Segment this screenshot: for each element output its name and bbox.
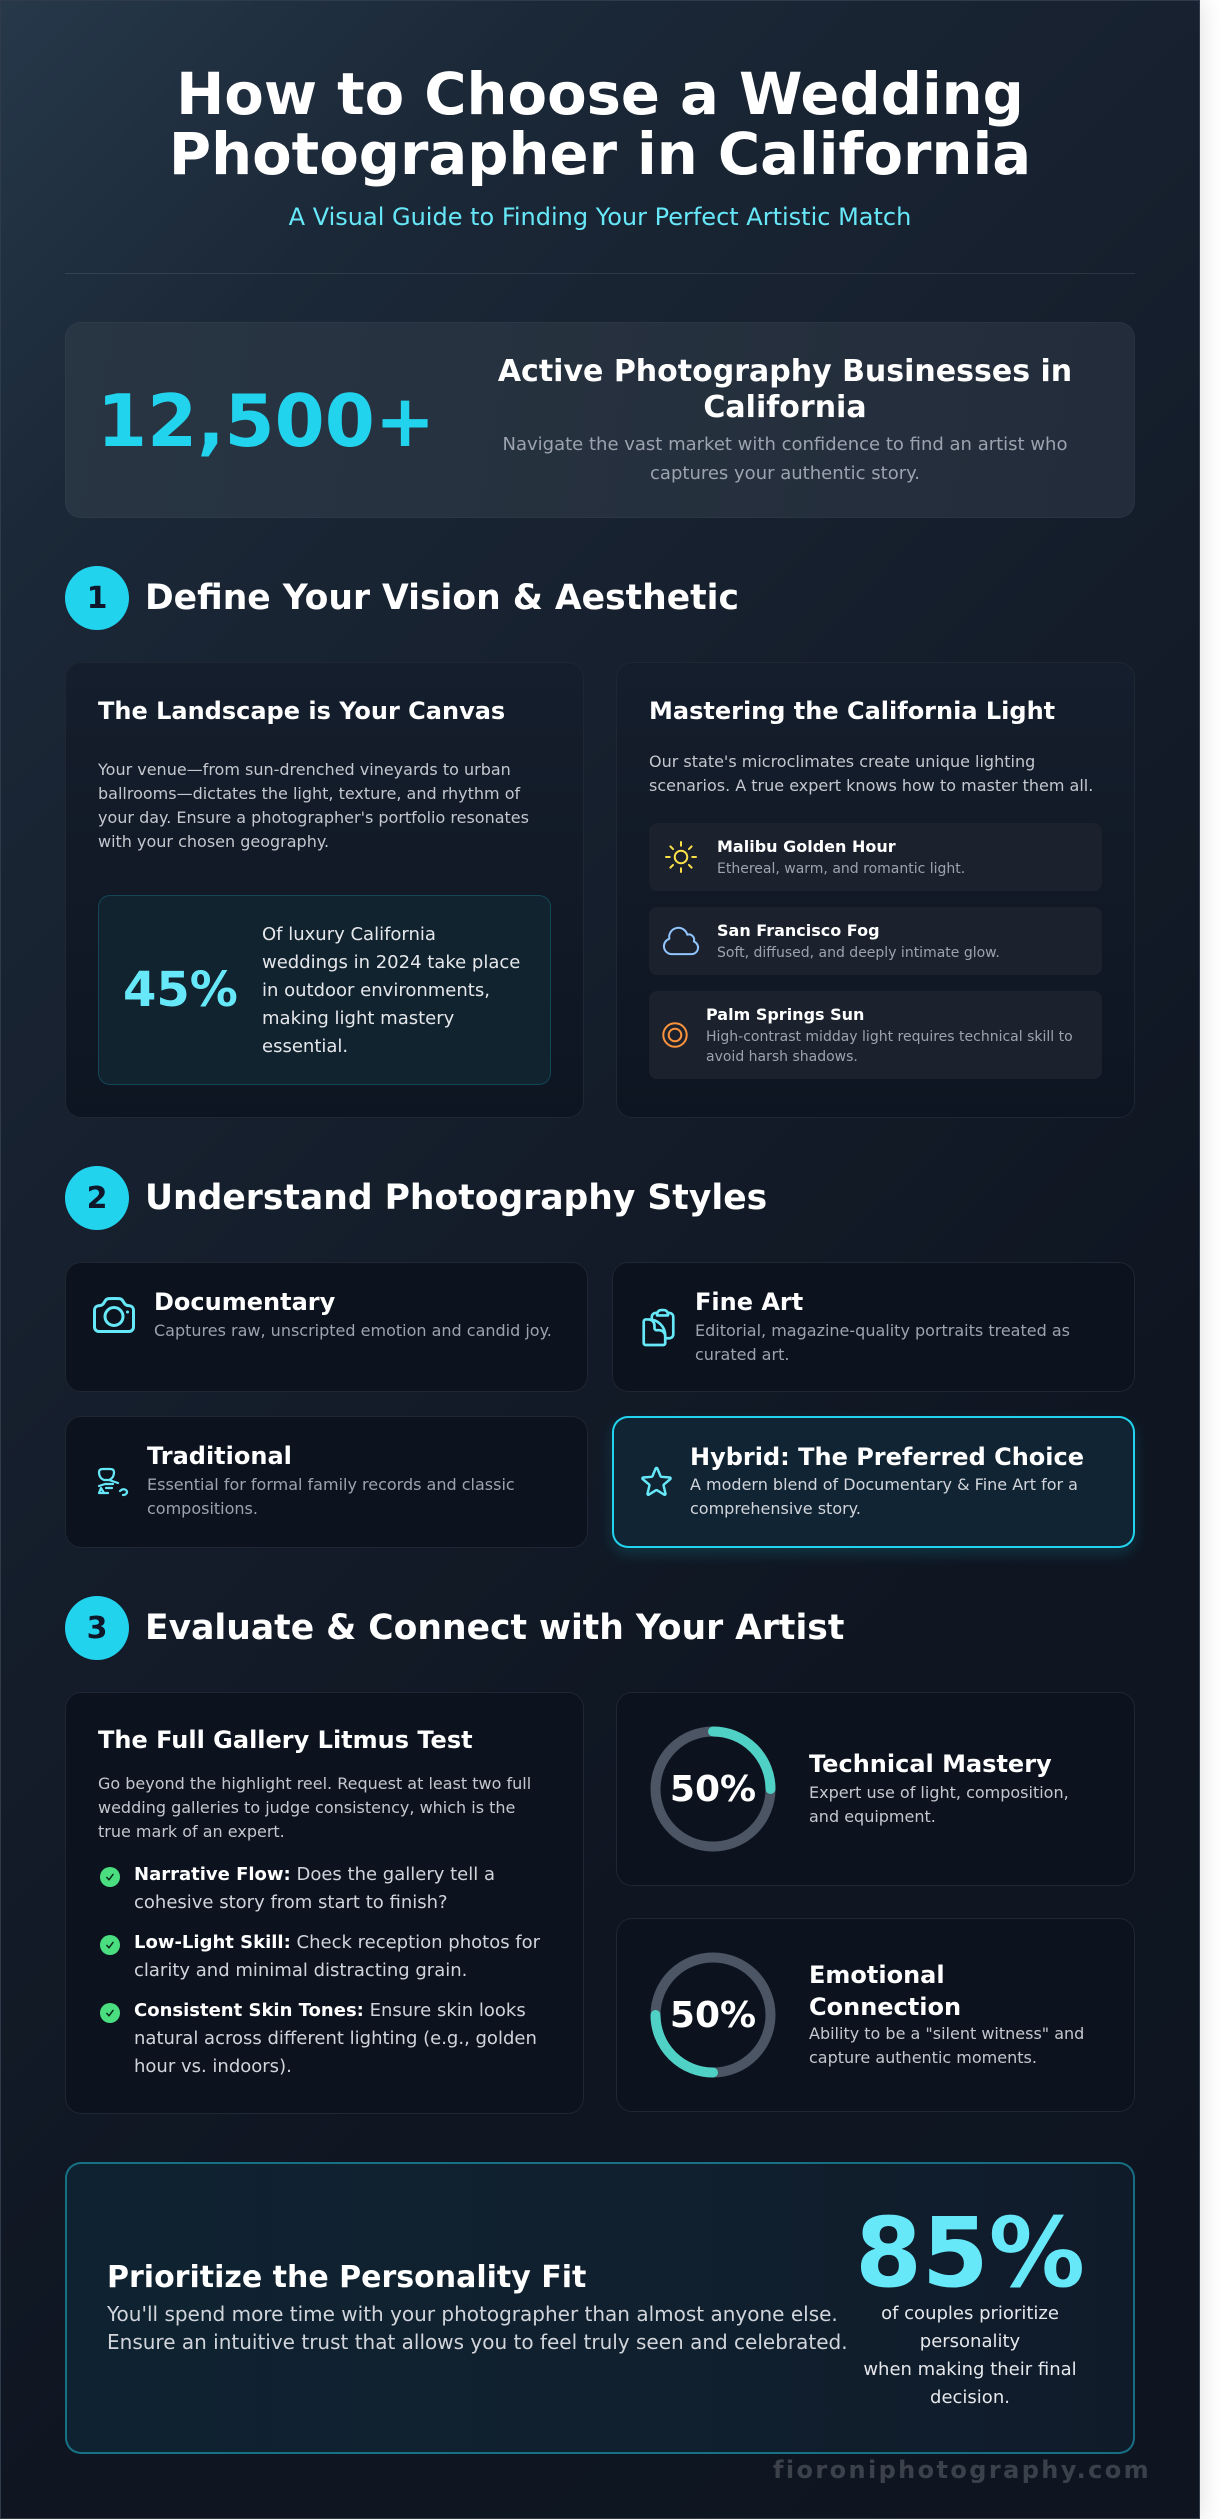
stat heading: California	[703, 390, 867, 425]
stat description: Navigate the vast market with confidence to find an artist who	[503, 434, 1067, 455]
stat heading: Active Photography Businesses in	[498, 354, 1072, 389]
ring chart: 50 percent	[650, 1726, 776, 1852]
step number 1	[65, 566, 129, 630]
style text: compositions.	[147, 1499, 258, 1518]
item text: Soft, diffused, and deeply intimate glow.	[717, 945, 1000, 961]
style card: Traditional	[65, 1416, 588, 1548]
title: Photographer in California	[169, 121, 1031, 188]
panel: california light	[616, 662, 1135, 1118]
list item 2	[134, 1932, 540, 1981]
metric title: Connection	[809, 1993, 961, 2021]
callout heading: Prioritize the Personality Fit	[107, 2260, 586, 2295]
metric title	[809, 1961, 961, 2021]
heading text: Evaluate & Connect with Your Artist	[145, 1608, 844, 1648]
section heading 2	[65, 1166, 767, 1230]
callout text: Ensure an intuitive trust that allows you to feel truly seen and celebrated.	[107, 2330, 848, 2354]
item title: Malibu Golden Hour	[717, 837, 896, 856]
metric text: Expert use of light, composition,	[809, 1783, 1069, 1802]
ring chart: 50 percent: 50%	[670, 1995, 756, 2036]
list item 3: Consistent Skin Tones: Ensure skin looks	[134, 2000, 526, 2021]
big stat: 85%	[855, 2197, 1085, 2309]
icon: clipboard	[642, 1308, 675, 1346]
title: How to Choose a Wedding	[176, 61, 1024, 128]
heading text: Understand Photography Styles	[145, 1178, 767, 1218]
metric title: Emotional	[809, 1961, 945, 1989]
icon: check 2	[100, 1935, 120, 1955]
metric text: and equipment.	[809, 1807, 936, 1826]
subtitle: A Visual Guide to Finding Your Perfect Artistic Match	[289, 203, 911, 231]
icon: cloud	[662, 926, 700, 956]
card heading: The Landscape is Your Canvas	[98, 697, 505, 725]
style name: Documentary	[154, 1288, 335, 1316]
list item 1	[134, 1864, 495, 1913]
ring chart: 50 percent: 50%	[670, 1769, 756, 1810]
stat value: 45%	[123, 962, 238, 1018]
style text	[695, 1321, 1070, 1364]
card text: scenarios. A true expert knows how to master them all.	[649, 776, 1093, 795]
style text: Editorial, magazine-quality portraits treated as	[695, 1321, 1070, 1340]
icon: camera	[93, 1297, 135, 1333]
card text	[98, 760, 529, 851]
metric text: Ability to be a "silent witness" and	[809, 2024, 1084, 2043]
style text: A modern blend of Documentary & Fine Art for a	[690, 1475, 1078, 1494]
list item 3: hour vs. indoors).	[134, 2056, 292, 2077]
big stat caption	[863, 2303, 1077, 2408]
header	[65, 65, 1135, 274]
stat number: 12,500+	[97, 379, 435, 463]
list item 3: natural across different lighting (e.g., golden	[134, 2028, 537, 2049]
list item 2: clarity and minimal distracting grain.	[134, 1960, 467, 1981]
light item: Malibu	[649, 823, 1102, 891]
style text: Captures raw, unscripted emotion and candid joy.	[154, 1321, 552, 1340]
stat heading	[498, 354, 1072, 425]
item text: avoid harsh shadows.	[706, 1049, 858, 1065]
stat text: in outdoor environments,	[262, 980, 490, 1001]
metric text	[809, 2024, 1084, 2067]
card text: Our state's microclimates create unique lighting	[649, 752, 1035, 771]
icon: check 1	[100, 1867, 120, 1887]
list item 3	[134, 2000, 537, 2077]
stat text	[262, 924, 520, 1057]
light item: San Francisco	[649, 907, 1102, 975]
callout: 45 percent	[98, 895, 551, 1085]
card text: Your venue—from sun-drenched vineyards to urban	[98, 760, 511, 779]
card text: Go beyond the highlight reel. Request at least two full	[98, 1774, 531, 1793]
style text: curated art.	[695, 1345, 789, 1364]
style text	[690, 1475, 1078, 1518]
card heading: Mastering the California Light	[649, 697, 1055, 725]
big stat caption: when making their final	[863, 2359, 1077, 2380]
style text	[147, 1475, 515, 1518]
card text	[98, 1774, 531, 1841]
stat description	[503, 434, 1067, 484]
card heading: The Full Gallery Litmus Test	[98, 1726, 473, 1754]
style card: Hybrid highlighted	[612, 1416, 1135, 1548]
step number 1: 1	[87, 581, 107, 616]
section heading 1	[65, 566, 739, 630]
watermark: fioroniphotography.com	[773, 2456, 1151, 2484]
panel: technical mastery	[616, 1692, 1135, 1886]
icon: figures	[98, 1468, 128, 1496]
item title: Palm Springs Sun	[706, 1005, 864, 1024]
item text	[706, 1029, 1073, 1065]
title	[169, 61, 1031, 188]
item text: Ethereal, warm, and romantic light.	[717, 861, 965, 877]
panel: key stat	[65, 322, 1135, 518]
section heading 3	[65, 1596, 844, 1660]
panel: emotional connection	[616, 1918, 1135, 2112]
callout: personality fit	[65, 2162, 1135, 2454]
step number 3	[65, 1596, 129, 1660]
ring chart: 50 percent	[650, 1952, 776, 2078]
style name: Traditional	[147, 1442, 292, 1470]
card text: ballrooms—dictates the light, texture, and rhythm of	[98, 784, 520, 803]
callout text: You'll spend more time with your photographer than almost anyone else.	[107, 2302, 838, 2326]
icon: star	[641, 1466, 672, 1496]
icon: target sun	[662, 1022, 688, 1048]
callout text	[107, 2302, 848, 2354]
metric title: Technical Mastery	[809, 1750, 1052, 1778]
heading text: Define Your Vision & Aesthetic	[145, 578, 739, 618]
stat text: weddings in 2024 take place	[262, 952, 520, 973]
panel: landscape	[65, 662, 584, 1118]
card text	[649, 752, 1093, 795]
stat text: essential.	[262, 1036, 348, 1057]
light item: Palm Springs	[649, 991, 1102, 1079]
card text: with your chosen geography.	[98, 832, 329, 851]
stat text: making light mastery	[262, 1008, 454, 1029]
step number 2	[65, 1166, 129, 1230]
card text: wedding galleries to judge consistency, which is the	[98, 1798, 515, 1817]
big stat caption: personality	[920, 2331, 1020, 2352]
list item 1: cohesive story from start to finish?	[134, 1892, 448, 1913]
item title: San Francisco Fog	[717, 921, 880, 940]
icon: sun	[665, 841, 697, 873]
item text: High-contrast midday light requires technical skill to	[706, 1029, 1073, 1045]
metric text: capture authentic moments.	[809, 2048, 1037, 2067]
style text: comprehensive story.	[690, 1499, 861, 1518]
step number 3: 3	[87, 1611, 107, 1646]
list item 1: Narrative Flow: Does the gallery tell a	[134, 1864, 495, 1885]
style text: Essential for formal family records and classic	[147, 1475, 515, 1494]
panel: gallery test	[65, 1692, 584, 2114]
big stat caption: decision.	[930, 2387, 1010, 2408]
style name: Fine Art	[695, 1288, 803, 1316]
card text: true mark of an expert.	[98, 1822, 285, 1841]
metric text	[809, 1783, 1069, 1826]
check list	[100, 1864, 540, 2077]
stat description: captures your authentic story.	[650, 463, 920, 484]
style card: Fine Art	[612, 1262, 1135, 1392]
icon: check 3	[100, 2003, 120, 2023]
step number 2: 2	[87, 1181, 107, 1216]
style card: Documentary	[65, 1262, 588, 1392]
stat text: Of luxury California	[262, 924, 436, 945]
list item 2: Low-Light Skill: Check reception photos for	[134, 1932, 540, 1953]
style name: Hybrid: The Preferred Choice	[690, 1443, 1084, 1471]
card text: your day. Ensure a photographer's portfolio resonates	[98, 808, 529, 827]
big stat caption: of couples prioritize	[881, 2303, 1059, 2324]
